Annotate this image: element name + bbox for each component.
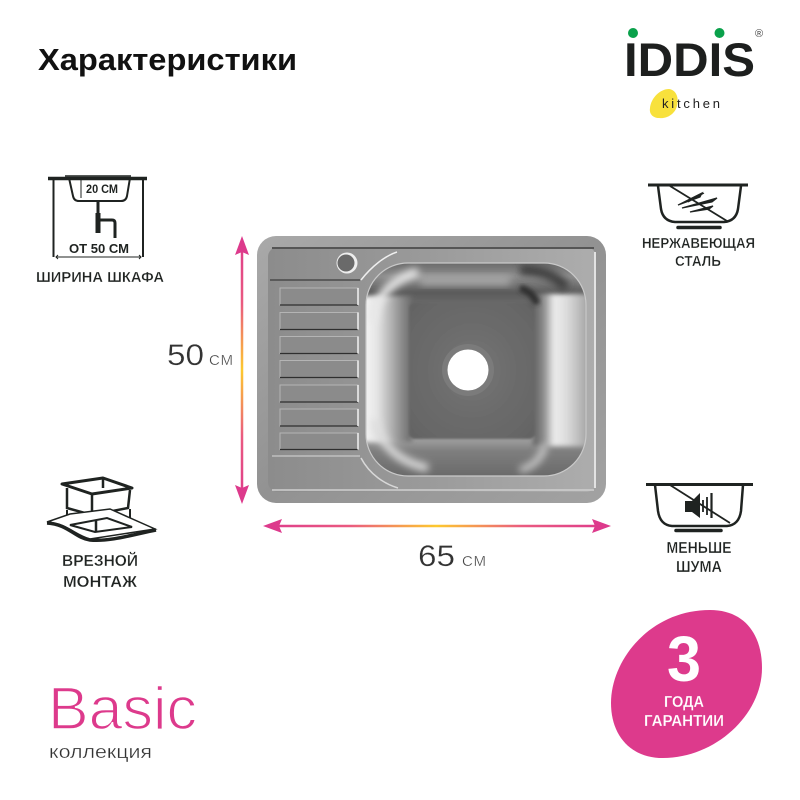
dimension arrow: height xyxy=(235,236,249,504)
logo wordmark: IDDIS xyxy=(624,33,755,86)
icon: less noise xyxy=(646,484,753,530)
icon: cabinet width xyxy=(48,176,147,259)
dimension: 50 cm xyxy=(167,339,233,372)
warranty text: ГОДА xyxy=(664,694,704,711)
icon: cut-in mount xyxy=(47,478,156,540)
dimension arrow: width xyxy=(263,519,611,533)
bowl right wall xyxy=(533,294,589,446)
registered mark: ® xyxy=(755,28,763,40)
sink photo xyxy=(257,236,606,503)
label: steel line 2: СТАЛЬ xyxy=(675,254,721,270)
drain hole xyxy=(442,344,494,396)
label: less: МЕНЬШЕ xyxy=(666,540,732,557)
drainboard ribs xyxy=(280,288,358,450)
dimension: 65 cm: СМ xyxy=(462,553,486,570)
bowl top wall xyxy=(368,264,584,302)
icon: green dot left xyxy=(628,28,638,38)
label: cabinet width: ШИРИНА ШКАФА xyxy=(36,269,164,286)
icon: green dot right xyxy=(714,28,724,38)
sink bowl xyxy=(360,258,590,480)
icon: stainless steel xyxy=(648,185,748,228)
dimension: 50 cm: 50 xyxy=(167,339,204,372)
warranty number: 3 xyxy=(667,623,701,695)
label: 20 cm: 20 СМ xyxy=(86,184,118,196)
warranty badge: ГАРАНТИИ xyxy=(644,713,724,730)
label: cut-in: ВРЕЗНОЙ xyxy=(62,551,138,570)
icon: yellow blob xyxy=(650,89,678,118)
dimension: 65 cm xyxy=(418,540,486,573)
label: stainless steel: НЕРЖАВЕЮЩАЯ xyxy=(642,236,755,252)
label: mounting: МОНТАЖ xyxy=(63,574,138,591)
sink rim xyxy=(257,236,606,503)
label: from 50 cm: ОТ 50 СМ xyxy=(69,241,129,256)
collection label: коллекция xyxy=(49,742,152,762)
bowl floor xyxy=(409,302,535,439)
dimension: 65 cm: 65 xyxy=(418,540,455,573)
label: noise: ШУМА xyxy=(676,559,722,576)
sink deck xyxy=(268,247,596,492)
logo kitchen label: kitchen xyxy=(662,96,720,111)
title: Характеристики xyxy=(38,42,297,77)
logo: IDDIS kitchen xyxy=(624,28,763,118)
icon: tap hole xyxy=(336,252,358,274)
dimension: 50 cm: СМ xyxy=(209,352,233,369)
bowl left wall xyxy=(362,296,412,442)
collection name: Basic xyxy=(48,675,197,742)
bowl bottom wall xyxy=(368,437,582,476)
warranty badge xyxy=(611,610,762,758)
